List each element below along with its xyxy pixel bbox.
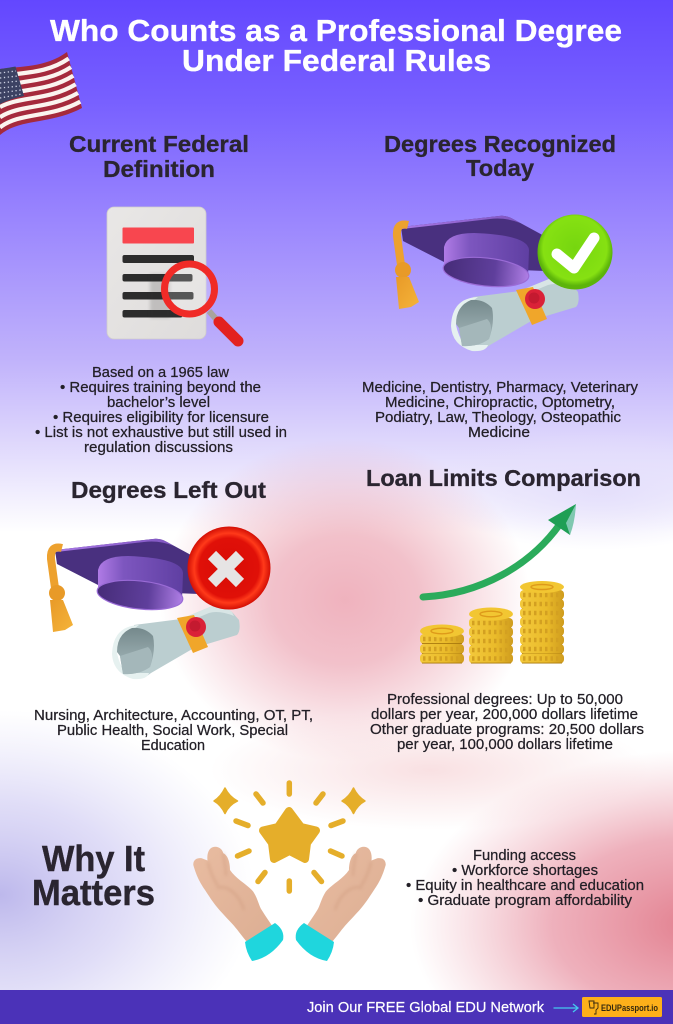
heading: current federal definition [69,131,249,182]
text: excluded degrees: Public Health, Social Work, Special [57,723,288,739]
arrow: footer pointer [554,1004,578,1012]
panel: why it matters [32,783,644,961]
text: loan limits: Professional degrees: Up to 50,000 [387,692,623,708]
text: why it matters list: • Workforce shortages [452,863,598,879]
text: definition details: • List is not exhaustive but still used in [35,425,287,441]
text: excluded degrees [34,708,313,754]
text: why it matters list [406,848,644,909]
text: definition details: • Requires training beyond the [60,380,261,396]
text: definition details [35,365,287,456]
icon: document with magnifier [107,207,238,341]
text: definition details: Based on a 1965 law [92,365,230,381]
text: why it matters list: • Graduate program affordability [418,893,633,909]
heading: degrees recognized today [384,131,616,181]
text: loan limits: per year, 100,000 dollars lifetime [397,737,613,753]
badge: EDUPassport.io: EDUPassport.io [601,1003,658,1013]
title [50,13,622,78]
heading: current federal definition: Current Federal [69,131,249,157]
icon: hands holding a star [193,783,386,961]
heading: degrees recognized today: Today [466,155,534,181]
text: recognized degrees [362,380,639,441]
panel: current federal definition [35,131,287,456]
heading: why it matters [32,838,155,913]
text: loan limits: dollars per year, 200,000 dollars lifetime [371,707,638,723]
text: excluded degrees: Education [141,738,205,754]
heading: why it matters: Why It [42,838,145,879]
icon: graduation cap and diploma with cross [49,526,270,679]
text: definition details: bachelor’s level [107,395,210,411]
badge: EDUPassport.io [582,997,662,1017]
icon: American flag [0,52,82,135]
heading: degrees left out: Degrees Left Out [71,477,266,503]
heading: why it matters: Matters [32,872,155,913]
heading: current federal definition: Definition [103,156,215,182]
footer bar [0,990,673,1024]
text: loan limits: Other graduate programs: 20,500 dollars [370,722,644,738]
text: recognized degrees: Podiatry, Law, Theology, Osteopathic [375,410,621,426]
panel: degrees left out [34,477,313,754]
panel: degrees recognized today [362,131,639,441]
text: why it matters list: • Equity in healthcare and education [406,878,644,894]
text: recognized degrees: Medicine, Chiropractic, Optometry, [385,395,615,411]
panel: loan limits comparison [366,465,644,753]
title: Who Counts as a Professional Degree [50,13,622,48]
heading: degrees recognized today: Degrees Recognized [384,131,616,157]
heading: loan limits comparison: Loan Limits Comparison [366,465,641,491]
text: definition details: regulation discussions [84,440,233,456]
icon: rising arrow and coin stacks [420,504,576,664]
title: Under Federal Rules [182,43,491,78]
icon: graduation cap and diploma with check [395,214,612,351]
text: definition details: • Requires eligibility for licensure [53,410,269,426]
text: why it matters list: Funding access [473,848,576,864]
text: recognized degrees: Medicine, Dentistry, Pharmacy, Veterinary [362,380,639,396]
text: excluded degrees: Nursing, Architecture, Accounting, OT, PT, [34,708,313,724]
text: recognized degrees: Medicine [468,425,530,441]
footer call to action: Join Our FREE Global EDU Network [307,1000,545,1016]
text: loan limits [370,692,644,753]
